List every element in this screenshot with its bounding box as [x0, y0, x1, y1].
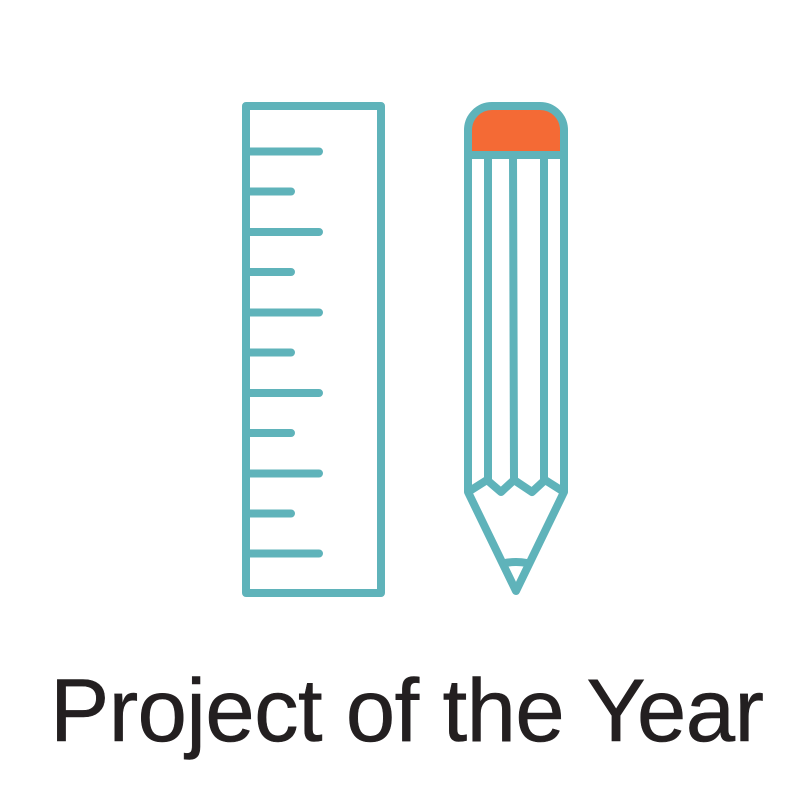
icon: pencil	[468, 106, 564, 591]
title: Project of the Year	[50, 660, 764, 760]
pencil eraser	[468, 106, 564, 155]
pencil body and tip	[468, 155, 564, 591]
icon: ruler	[246, 106, 381, 593]
